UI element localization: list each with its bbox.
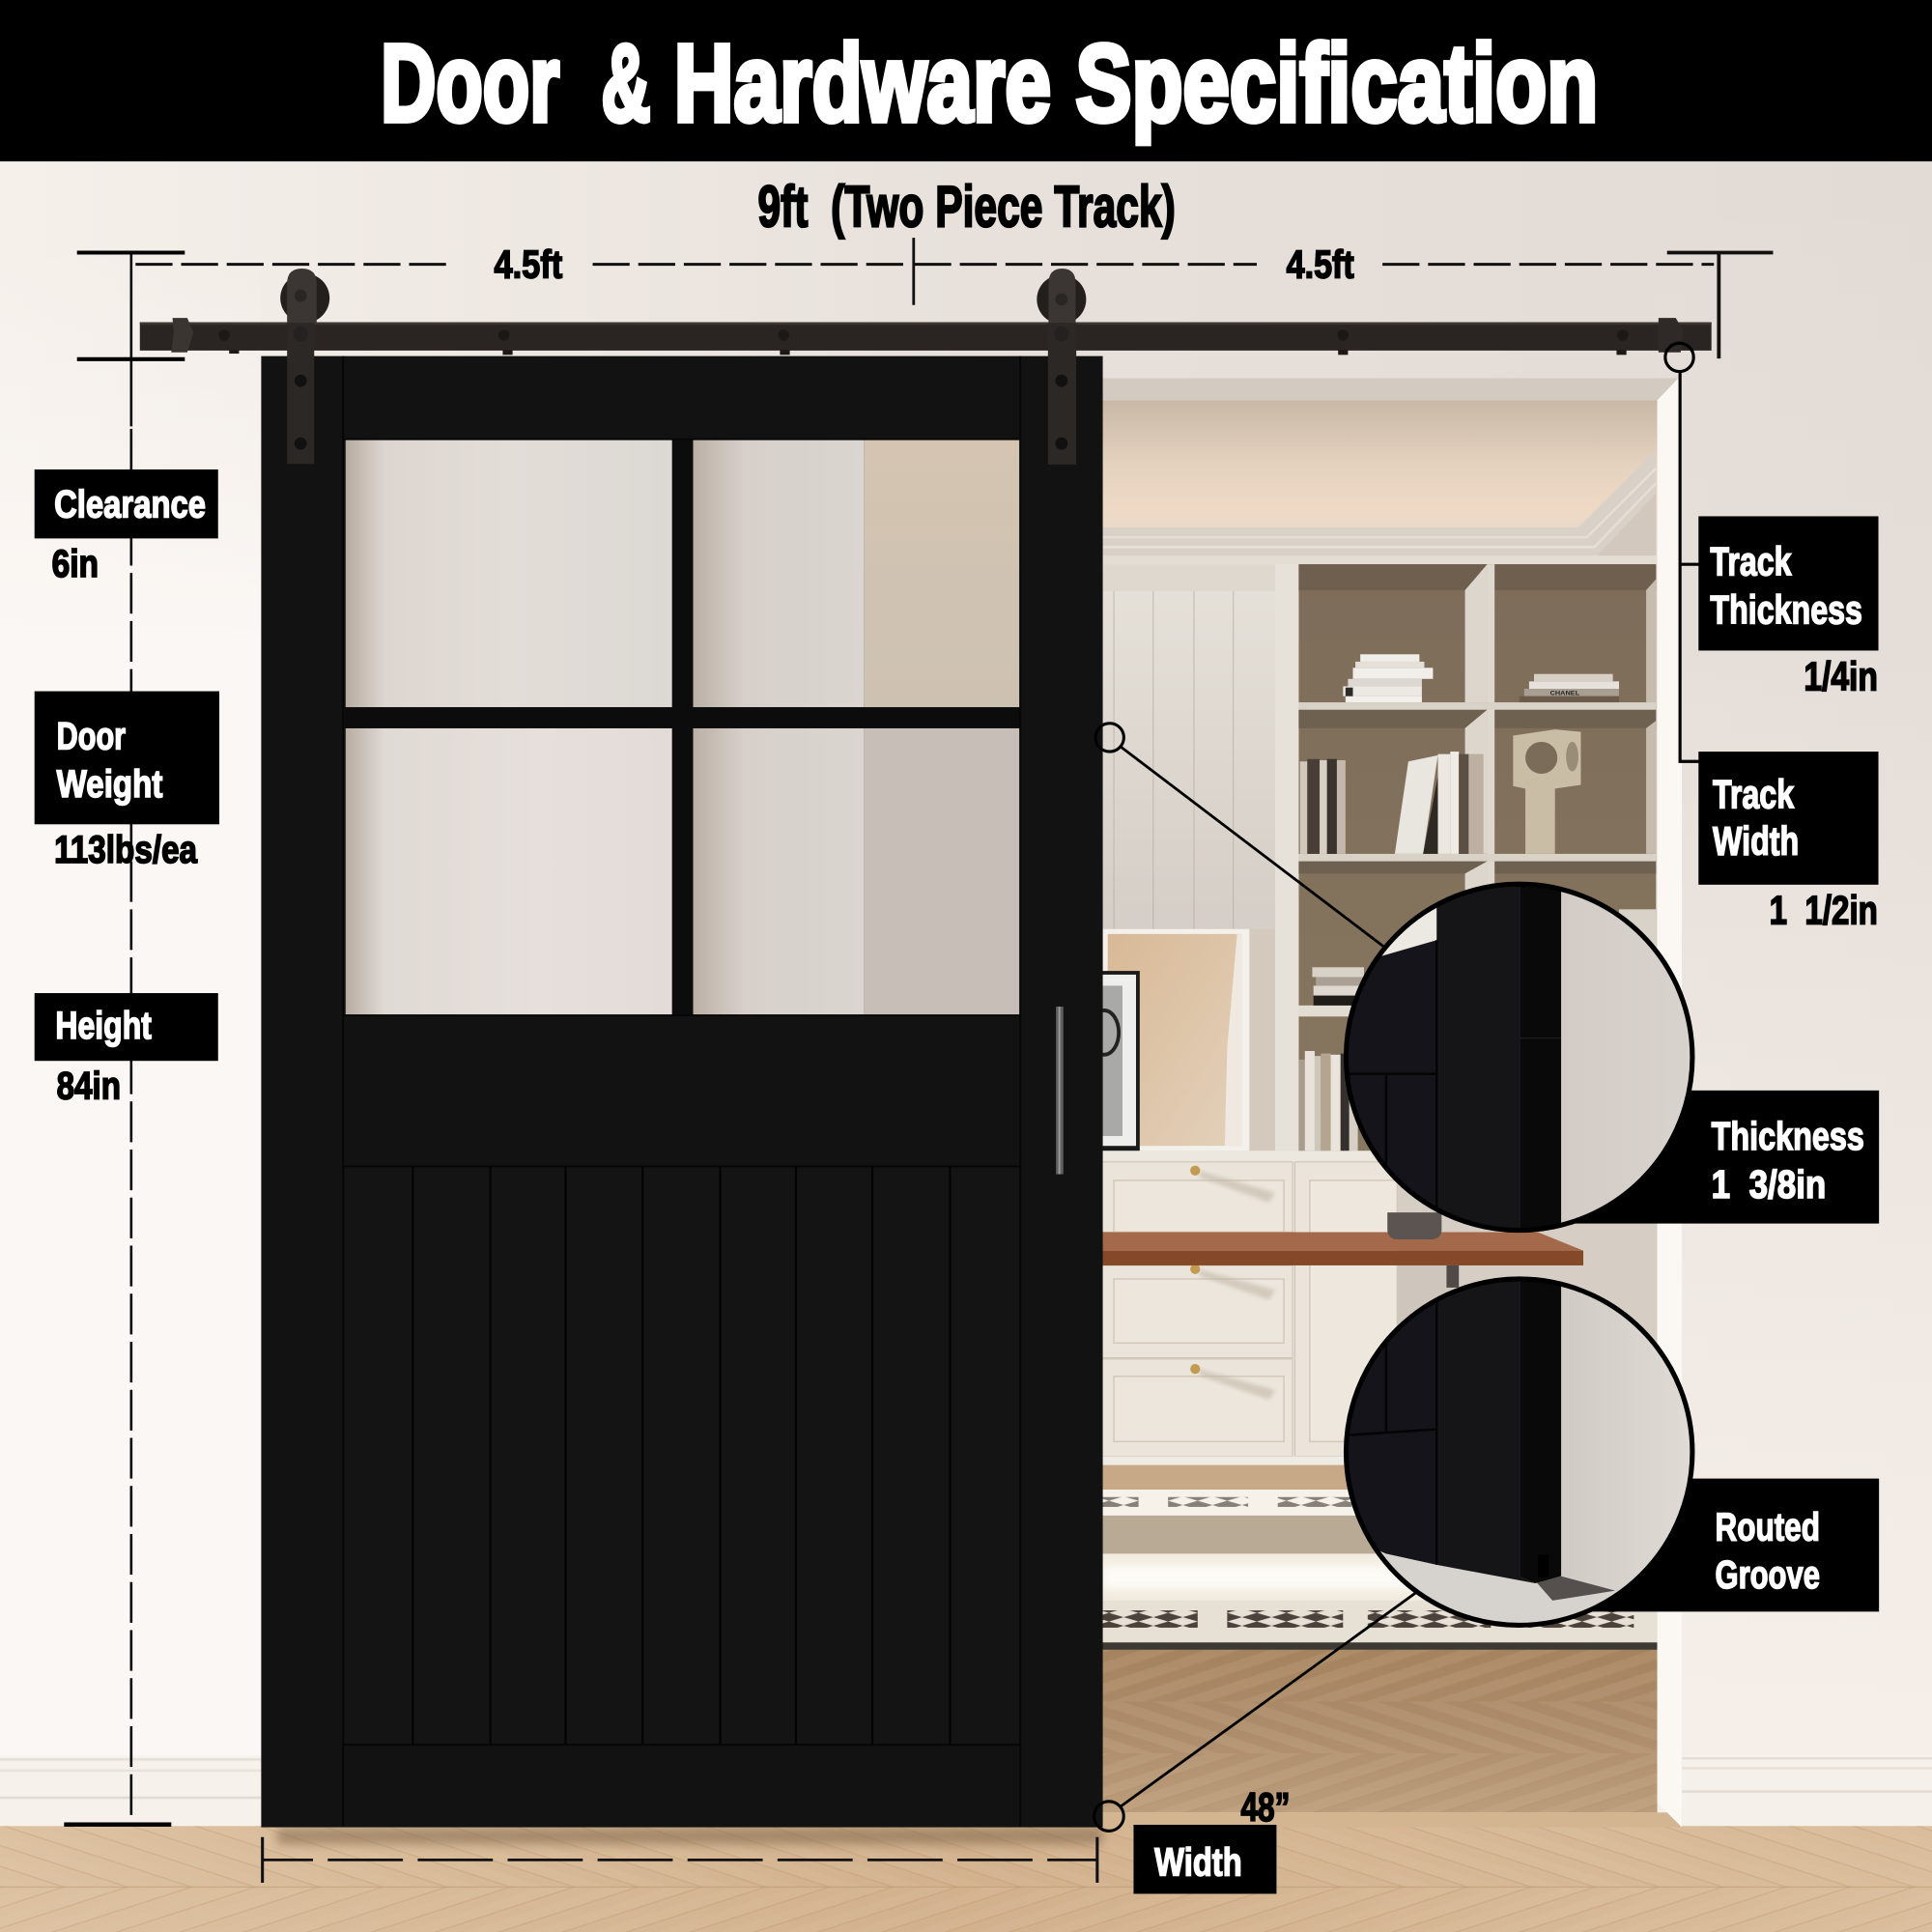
books: middle centre group <box>1395 752 1484 854</box>
desk <box>1101 1233 1583 1288</box>
label: left 4.5ft: 4.5ft <box>494 242 563 287</box>
label: width: 48” <box>1240 1784 1290 1830</box>
sculpture <box>1513 729 1580 854</box>
brass knobs <box>1190 1166 1275 1400</box>
glass pane: top right <box>693 440 1019 707</box>
small framed photo <box>1090 971 1140 1151</box>
wainscot top <box>1101 564 1275 591</box>
label: clearance: 6in <box>52 543 99 585</box>
back floor <box>1101 1465 1658 1490</box>
dimension: door width <box>263 1837 1097 1883</box>
glass pane: top left <box>346 440 672 707</box>
detail circle: door thickness <box>1343 881 1695 1234</box>
baseboards <box>0 1756 1932 1826</box>
label: height: 84in <box>57 1065 121 1108</box>
label: right 4.5ft: 4.5ft <box>1287 242 1354 287</box>
label: track width: 1 1/2in <box>1770 888 1878 933</box>
barn door <box>261 356 1103 1828</box>
wainscot grooves <box>1114 591 1234 929</box>
label: door weight: 113lbs/ea <box>54 829 198 871</box>
rug pattern: far row <box>1101 1497 1351 1507</box>
wall behind desk <box>1397 1162 1658 1465</box>
molding highlights <box>1101 469 1656 547</box>
title: Door <box>381 22 559 145</box>
bowl <box>1387 1212 1441 1239</box>
track bolts <box>218 329 1629 355</box>
glass pane: bottom right <box>693 728 1019 1015</box>
door seams <box>343 356 1020 1826</box>
label: track thickness: Thickness <box>1710 586 1862 632</box>
track length heading: 9ft (Two Piece Track) <box>757 175 1176 240</box>
track end stop: right <box>1659 318 1683 353</box>
label: track thickness: 1/4in <box>1804 653 1878 698</box>
label: width <box>1133 1784 1290 1893</box>
label: track thickness: Track <box>1710 539 1792 584</box>
label: door weight: Weight <box>57 763 162 806</box>
title: Hardware <box>674 22 1051 145</box>
dimension: height and clearance line <box>64 252 185 1827</box>
books: top right stack: CHANEL <box>1550 690 1579 696</box>
door pull handle <box>1056 1007 1064 1175</box>
label: track width <box>1698 752 1879 933</box>
wall behind molding <box>1597 493 1656 555</box>
label: thickness: 1 3/8in <box>1712 1162 1826 1207</box>
cabinet drawers <box>1101 1162 1453 1465</box>
shelving structure <box>1275 564 1656 1151</box>
hanger strap: left <box>280 269 329 464</box>
books: top left stack <box>1343 654 1433 702</box>
lighter plank faces <box>345 1168 1019 1744</box>
books: top right stack <box>1520 674 1619 702</box>
large artwork <box>1103 929 1249 1151</box>
books: middle left group <box>1300 759 1346 854</box>
label: thickness: Thickness <box>1712 1114 1864 1158</box>
cabinet counter <box>1101 1151 1397 1162</box>
glass pane: bottom left <box>346 728 672 1015</box>
label: clearance: Clearance <box>54 484 206 526</box>
glowing ceiling <box>1101 401 1658 528</box>
crown molding <box>1101 450 1656 555</box>
label: thickness <box>1540 1091 1879 1224</box>
shelving unit back <box>1298 564 1656 1151</box>
label: door weight: Door <box>57 716 126 758</box>
label: height: Height <box>55 1005 152 1047</box>
rug <box>1101 1490 1658 1650</box>
plank grooves <box>412 1167 950 1745</box>
dimension: track lengths <box>135 238 1773 358</box>
books: third row <box>1312 909 1656 1006</box>
label: routed groove <box>1540 1479 1879 1611</box>
title <box>381 22 1598 145</box>
lintel soffit <box>1101 379 1678 401</box>
label: width: Width <box>1154 1839 1242 1884</box>
sliding track <box>140 318 1712 355</box>
floor <box>0 1826 1932 1932</box>
label: clearance <box>35 469 218 585</box>
detail circle: routed groove <box>1343 1275 1695 1633</box>
label: routed groove: Groove <box>1716 1552 1820 1597</box>
callout lines: track <box>1665 343 1699 761</box>
upper wall band <box>1101 555 1658 564</box>
title: & <box>601 22 650 145</box>
label: track width: Width <box>1713 818 1799 864</box>
door jamb <box>1658 379 1682 1828</box>
hanger strap: right <box>1037 269 1086 465</box>
near interior floor <box>1101 1650 1682 1828</box>
rug pattern: near row <box>1101 1610 1634 1628</box>
callout pointer: routed groove <box>1094 1592 1417 1831</box>
callout pointer: door thickness <box>1095 724 1385 948</box>
books: fourth row <box>1298 1051 1358 1151</box>
label: door weight <box>35 692 219 871</box>
label: routed groove: Routed <box>1716 1504 1820 1548</box>
label: height <box>35 993 218 1108</box>
track end stop: left <box>171 318 193 353</box>
muntins <box>345 440 1020 1015</box>
title: Specification <box>1076 22 1598 145</box>
panelled wainscot wall <box>1101 564 1275 929</box>
title bar <box>0 0 1932 161</box>
label: track thickness <box>1698 516 1879 698</box>
label: track width: Track <box>1713 772 1795 817</box>
wall beside artwork <box>1101 929 1275 1151</box>
room seen through doorway <box>1090 379 1682 1828</box>
